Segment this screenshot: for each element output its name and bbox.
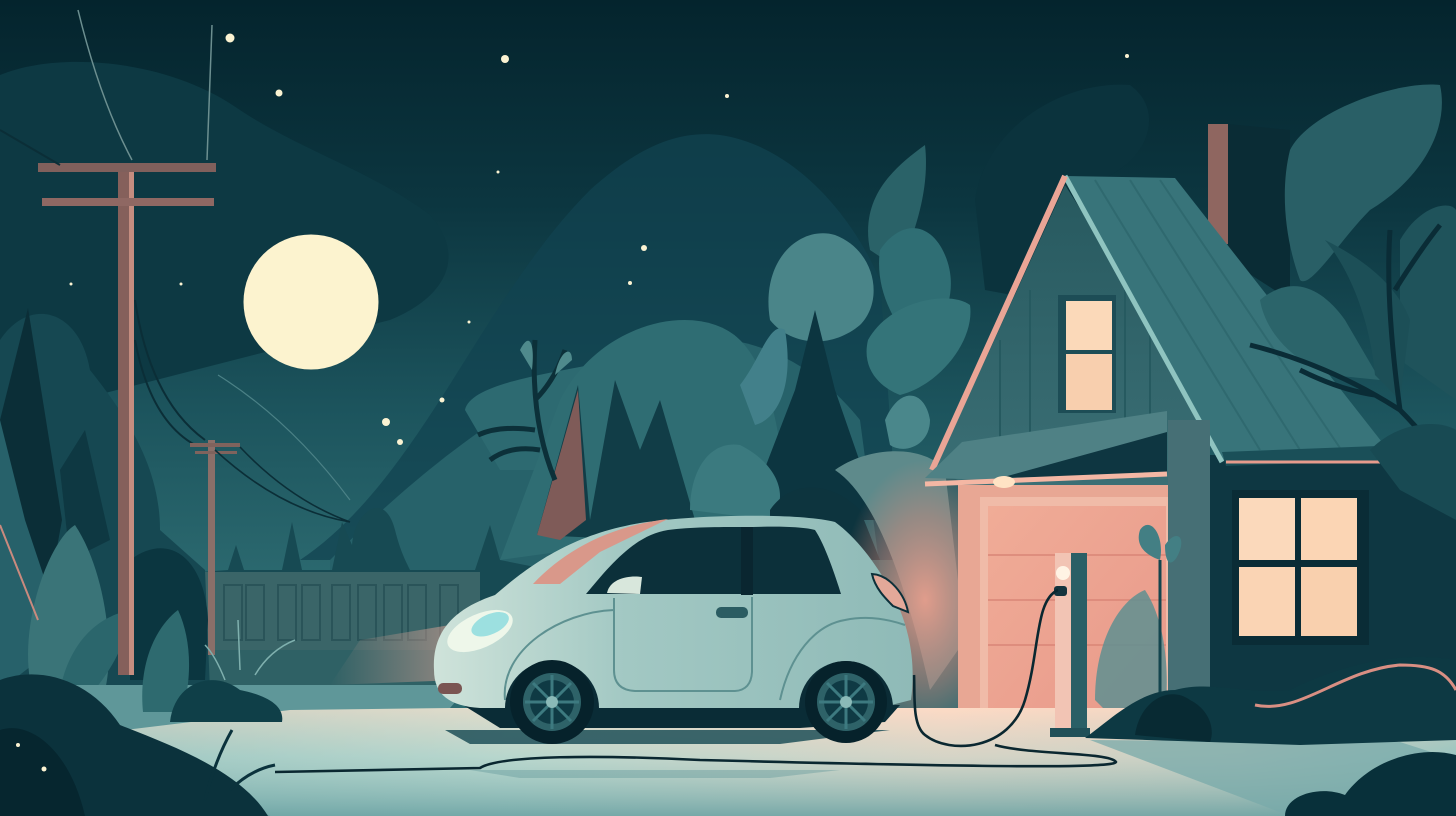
- mid-ground trees behind the car: [478, 145, 970, 690]
- rear wheel: [805, 661, 887, 743]
- tail light: [872, 574, 908, 612]
- charging post: [1050, 553, 1090, 737]
- lit lower wall: [958, 485, 1168, 715]
- body: [434, 516, 913, 708]
- dark side wall: [1210, 455, 1456, 705]
- stars: [70, 34, 1129, 445]
- right tree: [1250, 84, 1456, 520]
- headlight: [441, 601, 519, 661]
- charging cable: [275, 590, 1116, 772]
- front bumper vent: [438, 683, 462, 694]
- awning: [925, 411, 1167, 480]
- far utility pole and cables: [190, 375, 350, 655]
- side windows: [586, 527, 841, 594]
- door handle: [716, 607, 748, 618]
- headlight beam: [330, 625, 460, 685]
- ground: [0, 685, 1456, 816]
- chimney: [1208, 124, 1290, 300]
- door panel lines: [505, 597, 905, 700]
- left foliage: [0, 308, 210, 700]
- under shadow: [463, 705, 900, 728]
- left shrubs on the verge: [142, 610, 295, 722]
- foreground bushes left: [0, 674, 275, 816]
- side mirror: [607, 576, 642, 594]
- upper window: [1058, 295, 1116, 413]
- garage door: [980, 497, 1168, 717]
- moon: [244, 234, 378, 370]
- wheel arches: [505, 661, 599, 708]
- house: [925, 124, 1456, 717]
- distant treeline and fence: [200, 508, 560, 685]
- roof edge highlight: [1065, 176, 1222, 462]
- roof-edge reflection: [533, 519, 668, 584]
- large lit window: [1232, 490, 1369, 645]
- roof: [1065, 176, 1385, 460]
- foreground bushes right: [1085, 657, 1456, 816]
- background hills and clouds: [0, 62, 1149, 575]
- gable wall: [935, 185, 1210, 710]
- garage light glow: [840, 460, 1010, 740]
- front wheel: [510, 660, 594, 744]
- plant beside garage: [1095, 525, 1181, 715]
- near utility pole: [0, 10, 216, 675]
- car: [434, 516, 913, 744]
